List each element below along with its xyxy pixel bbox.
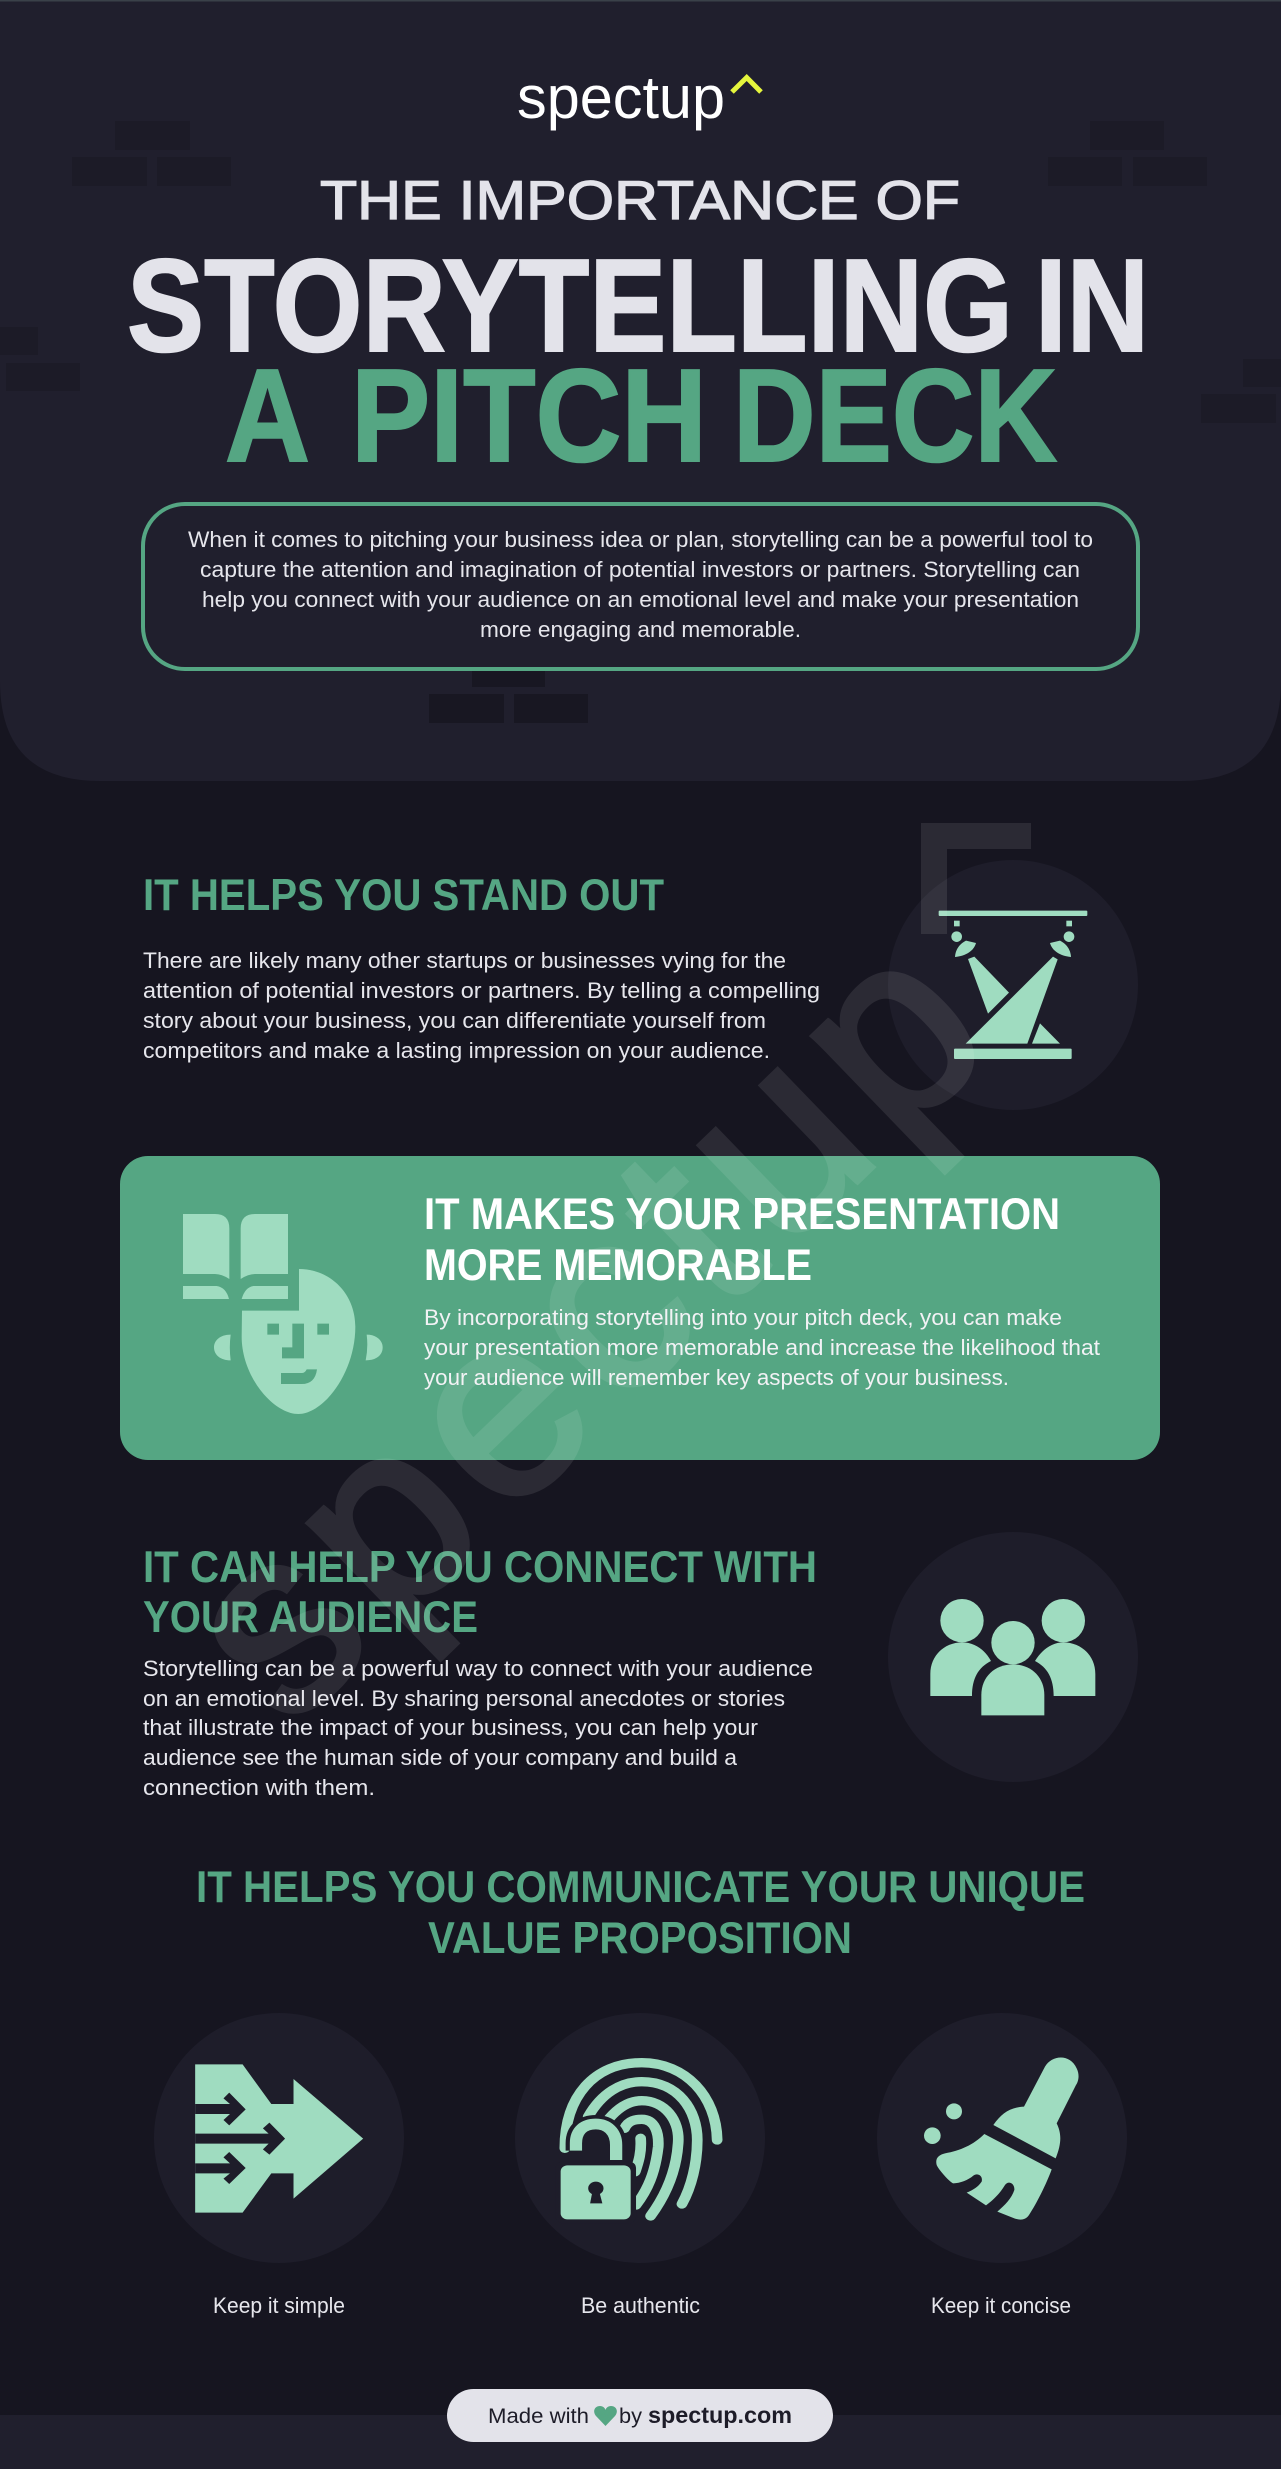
- icon: fingerprint and padlock: [515, 2013, 765, 2263]
- title: DECK: [733, 342, 1057, 489]
- title: [127, 169, 1149, 489]
- panel: it can help you connect with your audience: [143, 1532, 1138, 1800]
- title: PITCH: [351, 342, 707, 489]
- heading: memorable: MORE MEMORABLE: [424, 1241, 812, 1290]
- icon: three people: [888, 1532, 1138, 1782]
- panel: it helps you stand out: [143, 860, 1138, 1110]
- text block: stand out: competitors and make a lasting impression on your audience.: [143, 1038, 770, 1063]
- heading: unique value proposition: [196, 1863, 1085, 1963]
- text block: connect: audience see the human side of your company and build a: [143, 1745, 737, 1770]
- label: keep it simple: Keep it simple: [213, 2293, 345, 2318]
- text block: stand out: [143, 948, 820, 1063]
- heading: memorable: IT MAKES YOUR PRESENTATION: [424, 1190, 1060, 1239]
- title: THE IMPORTANCE OF: [320, 169, 960, 231]
- footer badge: made with love by spectup.com: spectup.com: [648, 2402, 792, 2428]
- title: STORYTELLING: [127, 232, 1013, 379]
- callout: introduction box: When it comes to pitching your business idea or plan, storytelling can be a powerful tool to: [188, 527, 1093, 552]
- label: keep it concise: Keep it concise: [931, 2293, 1071, 2318]
- text block: memorable: [424, 1305, 1101, 1390]
- text block: memorable: your presentation more memorable and increase the likelihood that: [424, 1335, 1101, 1360]
- footer badge: made with love by spectup.com: by: [619, 2405, 643, 2428]
- icon: book and head: [183, 1214, 383, 1414]
- callout: introduction box: help you connect with your audience on an emotional level and make your presentation: [202, 587, 1079, 612]
- footer badge: made with love by spectup.com: Made with: [488, 2405, 589, 2428]
- panel: keep it simple: [154, 2013, 404, 2318]
- heading: unique value proposition: VALUE PROPOSITION: [428, 1914, 852, 1963]
- panel: hero header background: [0, 0, 1281, 781]
- heading: connect: [143, 1543, 817, 1642]
- text block: stand out: attention of potential investors or partners. By telling a compelling: [143, 978, 820, 1003]
- text block: memorable: your audience will remember key aspects of your business.: [424, 1365, 1009, 1390]
- label: be authentic: Be authentic: [581, 2293, 700, 2318]
- text block: stand out: story about your business, you can differentiate yourself from: [143, 1008, 766, 1033]
- heading: memorable: [424, 1190, 1060, 1290]
- heading: connect: YOUR AUDIENCE: [143, 1593, 478, 1642]
- footer strip: [0, 2415, 1281, 2469]
- text block: connect: that illustrate the impact of your business, you can help your: [143, 1715, 759, 1740]
- heading: connect: IT CAN HELP YOU CONNECT WITH: [143, 1543, 817, 1592]
- icon: heart: [594, 2406, 617, 2426]
- logo: spectup: spectup: [517, 64, 725, 131]
- icon: merging arrows: [154, 2013, 404, 2263]
- panel: it makes your presentation more memorable: [120, 1156, 1160, 1460]
- text block: memorable: By incorporating storytelling into your pitch deck, you can make: [424, 1305, 1062, 1330]
- text block: connect: Storytelling can be a powerful way to connect with your audience: [143, 1656, 813, 1681]
- watermark: rotated spectup logo: spectup: [125, 868, 1048, 1773]
- text block: connect: connection with them.: [143, 1775, 375, 1800]
- callout: introduction box: [143, 504, 1138, 669]
- panel: keep it concise: [877, 2013, 1127, 2318]
- icon: broom: [877, 2013, 1127, 2263]
- title: A: [225, 342, 310, 489]
- text block: connect: [143, 1656, 813, 1800]
- text block: connect: on an emotional level. By sharing personal anecdotes or stories: [143, 1686, 785, 1711]
- callout: introduction box: more engaging and memorable.: [480, 617, 801, 642]
- heading: unique value proposition: IT HELPS YOU COMMUNICATE YOUR UNIQUE: [196, 1863, 1085, 1912]
- title: IN: [1035, 232, 1149, 379]
- callout: introduction box: capture the attention and imagination of potential investors or partners. Storytelling can: [200, 557, 1080, 582]
- footer badge: made with love by spectup.com: [447, 2389, 833, 2442]
- text block: stand out: There are likely many other startups or businesses vying for the: [143, 948, 786, 973]
- heading: stand out: IT HELPS YOU STAND OUT: [143, 871, 664, 920]
- icon: spotlights on stage: [888, 860, 1138, 1110]
- panel: be authentic: [515, 2013, 765, 2318]
